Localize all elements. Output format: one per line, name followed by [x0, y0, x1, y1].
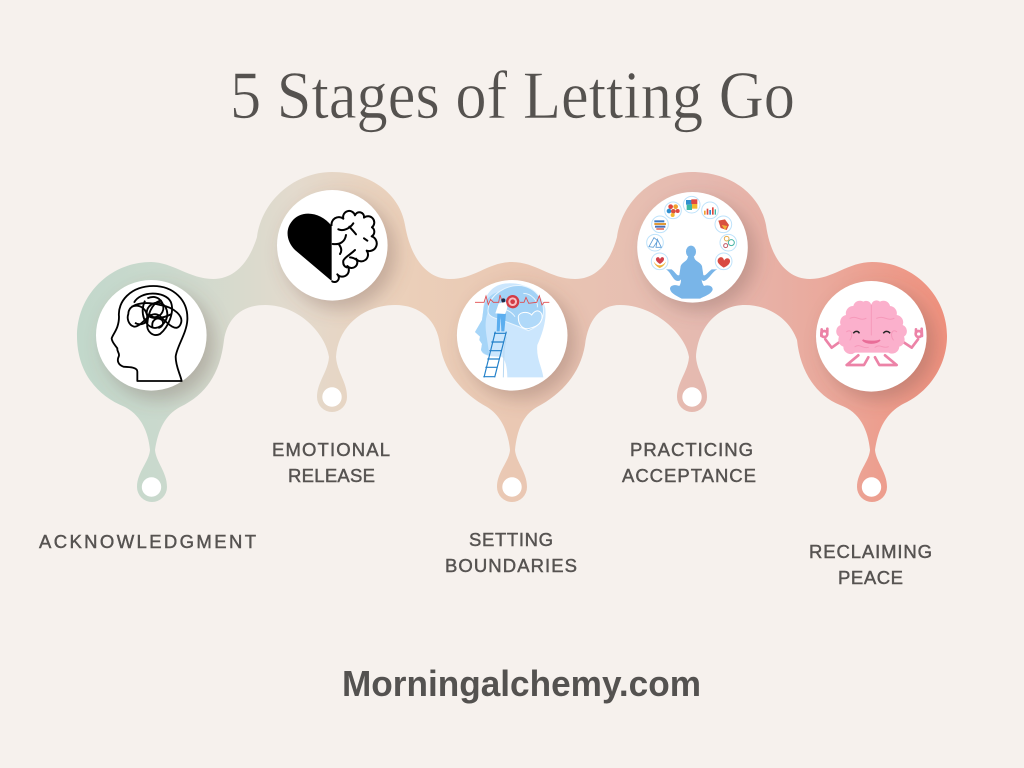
label: reclaiming peace — [809, 541, 932, 588]
label: emotional release — [272, 439, 390, 486]
stage 1 icon: tangled thoughts in head — [96, 280, 207, 391]
label: emotional release: RELEASE — [288, 465, 375, 486]
stage 4 icon: meditating figure with surrounding emblems — [637, 192, 748, 303]
label: setting boundaries: BOUNDARIES — [445, 555, 577, 576]
label: practicing acceptance: PRACTICING — [630, 439, 753, 460]
label: acknowledgment: ACKNOWLEDGMENT — [39, 531, 256, 552]
label: practicing acceptance: ACCEPTANCE — [622, 465, 756, 486]
footer website: Morningalchemy.com — [342, 663, 701, 704]
stage 3 icon: person on ladder at head — [457, 280, 568, 391]
stage 5 icon: smiling meditating brain — [816, 281, 927, 392]
stage 2 icon: half heart half brain — [277, 190, 388, 301]
timeline ribbon with five nodes and pins — [77, 172, 947, 502]
label: emotional release: EMOTIONAL — [272, 439, 390, 460]
label: reclaiming peace: RECLAIMING — [809, 541, 932, 562]
title: 5 Stages of Letting Go — [230, 57, 795, 133]
label: setting boundaries — [445, 529, 577, 576]
label: setting boundaries: SETTING — [469, 529, 553, 550]
label: practicing acceptance — [622, 439, 756, 486]
label: reclaiming peace: PEACE — [838, 567, 903, 588]
